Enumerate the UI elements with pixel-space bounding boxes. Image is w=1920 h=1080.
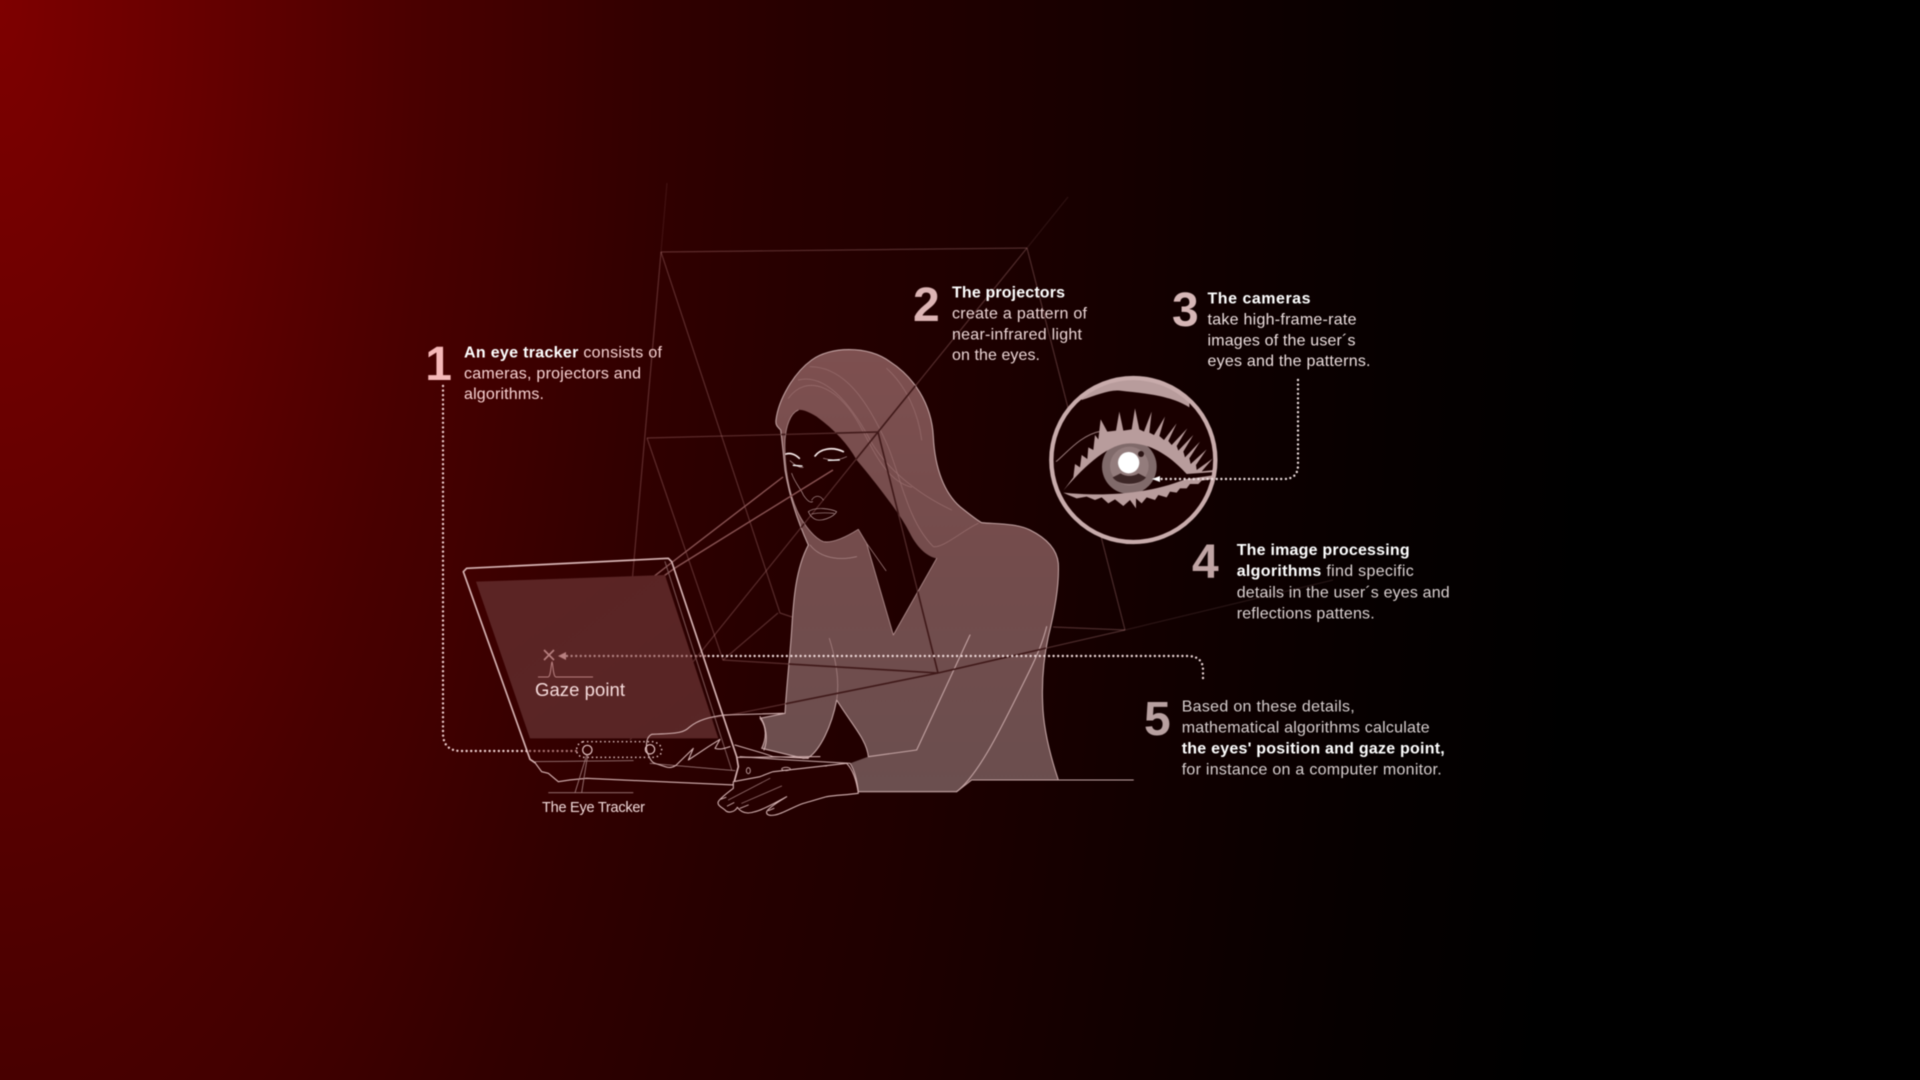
laptop base <box>535 763 733 785</box>
text block 5: mathematical algorithms calculate <box>1182 719 1430 736</box>
connector: step 3 to eye <box>1152 380 1298 482</box>
gaze point marker <box>538 650 593 677</box>
text block 4: The image processing <box>1237 542 1410 559</box>
upper eyelid with lashes <box>1063 408 1214 491</box>
text block 3: take high-frame-rate <box>1208 312 1357 328</box>
projection wireframe <box>620 183 1333 740</box>
hair strands <box>788 367 978 547</box>
label: Gaze point: Gaze point <box>535 679 625 700</box>
number 5: 5 <box>1144 693 1171 746</box>
woman figure <box>740 350 1133 792</box>
text block 3 <box>1208 291 1370 370</box>
step 2 <box>913 279 1088 364</box>
eye close-up lens <box>1051 373 1215 542</box>
connector: step 5 to gaze point <box>558 652 1203 678</box>
text block 5: the eyes' position and gaze point, <box>1182 740 1445 757</box>
face details <box>792 473 837 520</box>
label: The Eye Tracker: The Eye Tracker <box>542 800 645 816</box>
iris <box>1102 439 1157 494</box>
text block 4: reflections pattens. <box>1237 605 1375 622</box>
step 5 <box>1144 693 1445 778</box>
brow shade <box>1081 379 1190 408</box>
figure outline <box>740 350 1133 792</box>
text block 4 <box>1237 542 1450 622</box>
number 2: 2 <box>913 279 940 332</box>
text block 1: An eye tracker consists of <box>464 345 663 362</box>
hand in front of laptop <box>718 763 858 815</box>
laptop screen <box>476 575 718 738</box>
connector: step 1 to eye tracker <box>443 386 577 751</box>
hand on keyboard <box>646 713 783 767</box>
hands <box>646 713 858 815</box>
lower eyelid with lashes <box>1063 475 1213 508</box>
text block 1: cameras, projectors and <box>464 365 641 382</box>
number 3: 3 <box>1172 284 1199 337</box>
text block 2: on the eyes. <box>952 347 1040 364</box>
laptop lid <box>463 558 738 785</box>
number 1: 1 <box>425 338 452 391</box>
text block 2 <box>952 285 1088 364</box>
text block 3: eyes and the patterns. <box>1208 353 1370 370</box>
step 1 <box>425 338 663 403</box>
text block 5 <box>1182 699 1445 778</box>
wireframe seen over figure <box>780 384 1047 705</box>
text block 5: Based on these details, <box>1182 699 1355 716</box>
text block 4: algorithms find specific <box>1237 563 1414 580</box>
text block 4: details in the user´s eyes and <box>1237 584 1450 601</box>
laptop <box>463 558 820 785</box>
text block 2: create a pattern of <box>952 306 1088 323</box>
gaze beams from eye to screen <box>553 470 833 655</box>
text block 1: algorithms. <box>464 386 544 403</box>
number 4: 4 <box>1192 536 1219 589</box>
text block 5: for instance on a computer monitor. <box>1182 761 1442 778</box>
step 3 <box>1172 284 1370 370</box>
step 4 <box>1192 536 1450 622</box>
text block 2: near-infrared light <box>952 326 1083 343</box>
text block 3: The cameras <box>1208 291 1311 308</box>
text block 1 <box>464 345 663 403</box>
eye tracker device marker <box>548 742 662 793</box>
text block 3: images of the user´s <box>1208 332 1356 349</box>
text block 2: The projectors <box>952 285 1065 302</box>
